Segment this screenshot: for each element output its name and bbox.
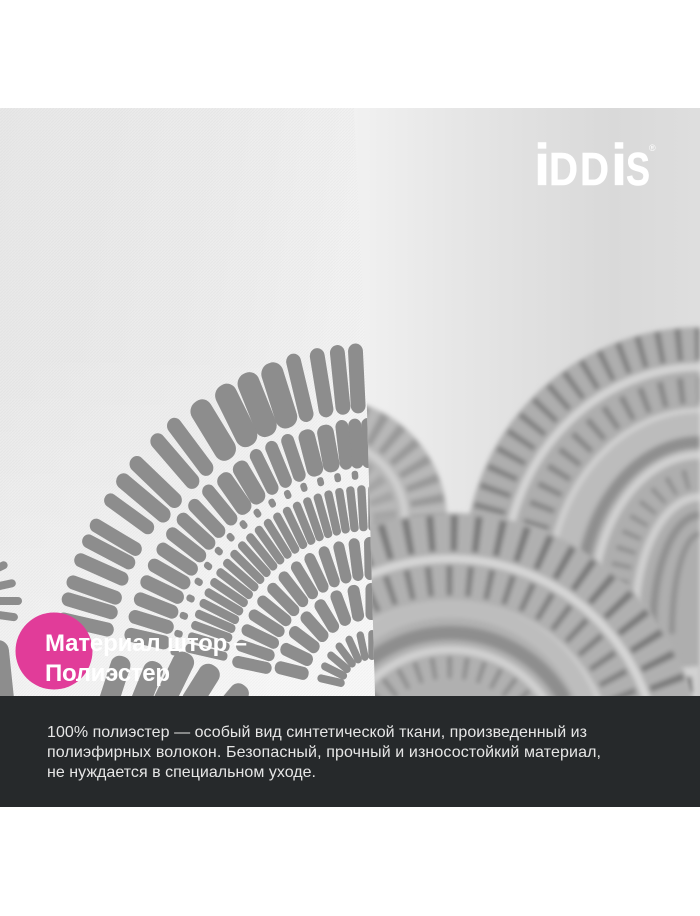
fifth ring of blobs (274, 583, 378, 681)
inner ring of strokes (317, 630, 376, 688)
dark description band (0, 696, 700, 807)
logo registered mark: ® (649, 143, 656, 153)
logo: iDDiS: i (611, 133, 627, 198)
fourth ring of blobs (231, 537, 376, 675)
pink accent circle (16, 612, 92, 690)
outer ring of blobs (56, 343, 366, 638)
lower-left neighbouring fan strokes (0, 640, 249, 696)
second ring of blobs (123, 418, 375, 651)
main radial fan of grey strokes (56, 343, 378, 688)
far-left neighbouring fan strokes (0, 560, 22, 622)
fan pattern: upper right fan (465, 327, 700, 700)
right curtain panel: blurred fan pattern (354, 108, 700, 696)
logo: iDDiS: i (534, 133, 550, 198)
description text: не нуждается в специальном уходе. (47, 764, 316, 781)
logo: iDDiS: S (626, 143, 650, 195)
fan pattern: lower centre fan (371, 510, 694, 696)
logo: iDDiS: D (580, 143, 609, 195)
heading: Материал штор – Полиэстер: Полиэстер (45, 660, 170, 687)
logo: iDDiS (534, 133, 656, 198)
description text: полиэфирных волокон. Безопасный, прочный и износостойкий материал, (47, 744, 601, 761)
fan pattern: small fan behind fold (366, 403, 448, 528)
ring of small dots (170, 470, 376, 656)
left curtain panel: sharp fan pattern (0, 108, 380, 718)
logo: iDDiS: D (549, 143, 578, 195)
heading: Материал штор – Полиэстер: Материал штор – (45, 630, 247, 657)
description text: 100% полиэстер — особый вид синтетической ткани, произведенный из (47, 724, 587, 741)
third ring of thin strokes (185, 485, 377, 661)
fan pattern: bottom right fan (682, 664, 700, 696)
